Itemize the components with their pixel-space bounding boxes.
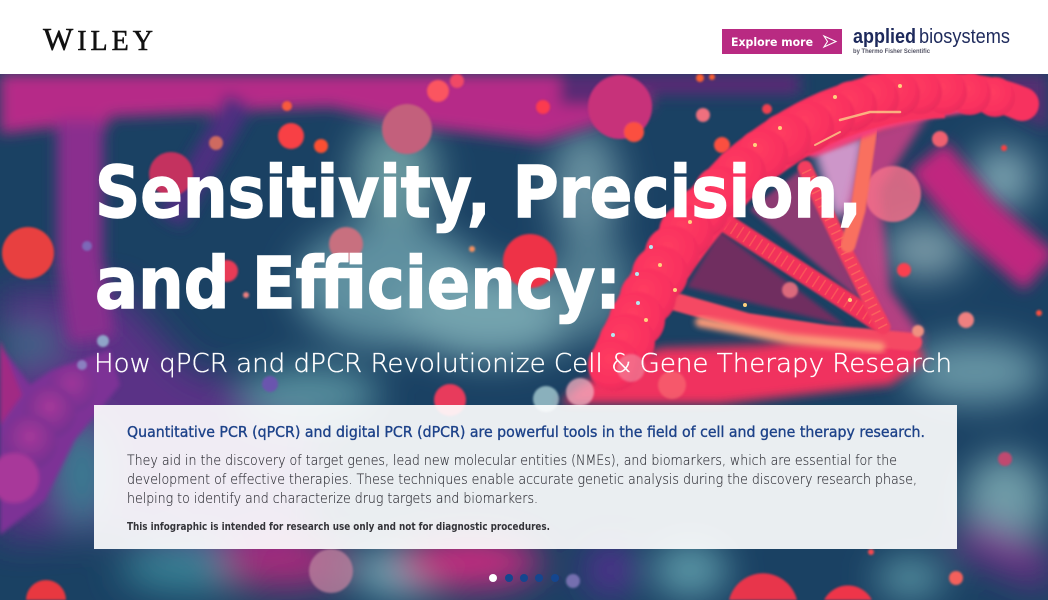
pale bubble behind helix	[865, 166, 921, 222]
button: explore more: Explore more	[731, 35, 813, 49]
helix interior shading	[687, 231, 846, 326]
logo: Wiley: WILEY	[43, 21, 153, 57]
second strand	[813, 100, 1000, 150]
text panel	[94, 405, 957, 549]
panel body text	[127, 453, 917, 507]
subtitle: How qPCR and dPCR Revolutionize Cell & Gene Therapy Research	[94, 349, 952, 379]
logo: applied biosystems: by Thermo Fisher Scientific	[853, 49, 931, 55]
logo: applied biosystems: applied	[853, 26, 916, 48]
logo: applied biosystems	[853, 26, 1010, 55]
panel heading: Quantitative PCR (qPCR) and digital PCR (dPCR) are powerful tools in the field of cell and gene therapy research.	[127, 423, 925, 441]
title	[95, 151, 862, 325]
dna helix	[560, 70, 1022, 406]
panel body text: They aid in the discovery of target genes, lead new molecular entities (NMEs), and biomarkers, which are essential for the	[127, 453, 897, 469]
panel body text: helping to identify and characterize drug targets and biomarkers.	[127, 491, 538, 507]
button: explore more	[722, 29, 842, 54]
header bar	[0, 0, 1048, 74]
highlights	[644, 84, 902, 322]
panel body text: development of effective therapies. These techniques enable accurate genetic analysis during the discovery research phase,	[127, 472, 917, 488]
helix pink lower band	[560, 336, 925, 404]
main backbone	[588, 70, 1022, 391]
title: Sensitivity, Precision,	[95, 151, 862, 234]
icon: paper-plane arrow	[824, 36, 836, 47]
rungs	[727, 224, 877, 321]
title: and Efficiency:	[95, 242, 621, 325]
translucent bubbles over helix	[566, 263, 924, 406]
purple bead strand lower left	[0, 340, 120, 535]
pagination dots	[489, 574, 559, 582]
logo: applied biosystems: biosystems	[919, 26, 1010, 48]
disclaimer: This infographic is intended for research use only and not for diagnostic procedures.	[127, 521, 550, 533]
